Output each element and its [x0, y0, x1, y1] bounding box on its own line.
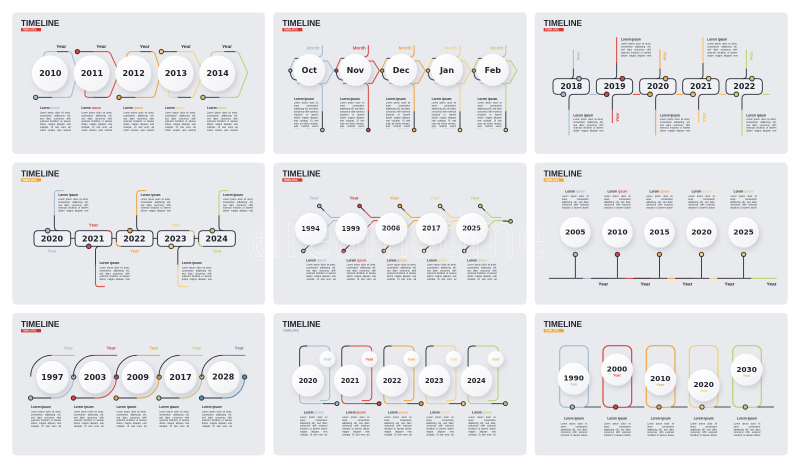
step 2020: 2020 [41, 234, 64, 243]
heading: TIMELINE [21, 18, 60, 28]
step Nov: Month [353, 45, 366, 50]
step 2005 [549, 189, 608, 286]
step 2019: Year [615, 112, 620, 122]
panel: hexagon year timeline [12, 12, 265, 154]
step 2010: Lorem ipsum [40, 106, 60, 110]
subtitle tag: TEMPLATES [284, 29, 298, 32]
watermark: dreamstime [253, 202, 547, 272]
panel background [535, 313, 788, 455]
step 2021 [334, 346, 381, 437]
step 2019: 2019 [604, 82, 626, 91]
step 2003: 2003 [84, 373, 106, 382]
step 2015: Lorem ipsum [650, 189, 670, 193]
heading: TIMELINE [282, 319, 321, 329]
step 2017 [157, 345, 204, 428]
step Jan [426, 45, 471, 132]
step 2014: Lorem ipsum [207, 106, 227, 110]
step 2019: Lorem ipsum [621, 38, 641, 42]
step 2021: Year [701, 112, 706, 122]
step 2009: 2009 [127, 373, 149, 382]
step 2020 [292, 346, 339, 437]
subtitle tag: TEMPLATES [545, 179, 559, 182]
panel background [273, 313, 527, 455]
step 2017: Year [192, 345, 201, 350]
step 2028: 2028 [212, 372, 235, 381]
step 2003 [71, 345, 119, 428]
step 2010: 2010 [39, 69, 62, 78]
step 2030: Year [743, 374, 751, 378]
step 2020: Lorem ipsum [692, 189, 712, 193]
step 2023 [157, 223, 212, 287]
step 2020: Year [725, 281, 735, 286]
step 2021 [75, 223, 129, 287]
step 1999 [335, 195, 385, 281]
step 2010: 2010 [650, 374, 671, 383]
step 2025: 2025 [462, 225, 481, 233]
step 1994: 1994 [301, 225, 320, 233]
step 1997: 1997 [41, 373, 63, 382]
step 2020: 2020 [691, 227, 712, 236]
step 2024: 2024 [206, 234, 228, 243]
step Feb: Month [490, 45, 504, 50]
step 2006 [375, 195, 425, 281]
step Oct [289, 45, 333, 132]
step Dec: Dec [393, 66, 410, 75]
step 2015: Year [683, 281, 693, 286]
step 2030: 2030 [736, 365, 757, 374]
step 2022: 2022 [733, 82, 755, 91]
step 2022: Lorem ipsum [746, 113, 766, 117]
step 1997: Year [64, 345, 73, 350]
step Jan: Lorem ipsum [432, 97, 452, 101]
step 2000: Year [613, 374, 621, 378]
step 2021: Lorem ipsum [707, 38, 727, 42]
step 2024 [199, 191, 253, 253]
step 2011: Lorem ipsum [81, 106, 101, 110]
step 2025 [456, 195, 512, 281]
step 2013: Year [181, 44, 191, 49]
step 2018: Year [576, 51, 581, 61]
step 2018 [553, 50, 603, 135]
step 2023 [418, 346, 465, 437]
step 2025: 2025 [733, 227, 754, 236]
step 2000: 2000 [607, 365, 627, 374]
step 2022: 2022 [123, 234, 145, 243]
step Feb: Lorem ipsum [477, 97, 498, 101]
step 2017: 2017 [422, 225, 441, 233]
step Dec: Lorem ipsum [386, 97, 406, 101]
step 2006: 2006 [382, 224, 401, 232]
heading: TIMELINE [544, 18, 582, 28]
step 2000 [601, 346, 644, 437]
step 2010: Year [640, 281, 651, 286]
step 2022 [116, 191, 171, 253]
step 2024: 2024 [467, 377, 486, 385]
step 2013 [158, 44, 203, 132]
heading: TIMELINE [21, 319, 60, 329]
step 2011: Year [96, 44, 106, 49]
step Nov: Lorem ipsum [340, 97, 360, 101]
step Nov [335, 45, 379, 132]
step 2009 [114, 345, 161, 428]
step 1994: Lorem ipsum [306, 258, 326, 262]
step 1994: Year [309, 195, 319, 200]
step 2014 [199, 44, 248, 132]
step 2021: Year [366, 357, 374, 361]
step 2021: Year [89, 223, 98, 228]
panel: linked box timeline [12, 163, 265, 305]
step Oct: Oct [302, 66, 317, 75]
step 2023: Year [450, 357, 458, 361]
step 1990: 1990 [563, 374, 584, 383]
panel: lollipop stem timeline [535, 163, 788, 305]
subtitle tag: TEMPLATES [22, 29, 37, 32]
step 2020 [688, 346, 731, 437]
step 2000: Lorem ipsum [607, 417, 627, 421]
step Oct: Lorem ipsum [294, 97, 314, 101]
panel background [12, 12, 265, 154]
step Feb: Feb [485, 66, 501, 75]
step 2020: Year [663, 51, 668, 61]
step Feb [472, 45, 517, 132]
step 2024: Lorem ipsum [223, 193, 243, 197]
step 2006: Lorem ipsum [387, 258, 407, 262]
panel: boxed year timeline with vertical branches [535, 12, 788, 154]
subtitle tag [544, 329, 564, 333]
step 2017: Lorem ipsum [159, 405, 179, 409]
heading: TIMELINE [282, 169, 321, 179]
step 2014: 2014 [207, 69, 229, 78]
step 2011: 2011 [81, 69, 103, 78]
step 2018: Lorem ipsum [573, 113, 593, 117]
step 2022 [376, 346, 423, 437]
step 2022 [726, 50, 776, 135]
step 2013: Lorem ipsum [165, 106, 185, 110]
panel background [273, 163, 527, 305]
step Dec [380, 45, 425, 132]
step 2022: Year [130, 248, 140, 253]
heading: TIMELINE [544, 319, 582, 329]
panel background [12, 163, 265, 305]
step 2024: Year [212, 248, 222, 253]
heading: TIMELINE [282, 18, 321, 28]
step 2028 [199, 345, 247, 428]
panel background [273, 12, 527, 154]
step 2017: 2017 [169, 373, 192, 382]
step 2010: 2010 [607, 227, 628, 236]
step 2022: Lorem ipsum [388, 410, 408, 414]
step 2012: Lorem ipsum [123, 106, 143, 110]
subtitle tag [282, 178, 302, 182]
heading: TIMELINE [21, 169, 60, 179]
step 2018: 2018 [560, 82, 582, 91]
step 2030: Lorem ipsum [737, 417, 757, 421]
step 2020: Year [323, 357, 332, 361]
step 2021: 2021 [341, 377, 360, 385]
step 2025 [718, 189, 777, 286]
step 2010: Year [56, 44, 66, 49]
step 2005: 2005 [565, 227, 586, 236]
step 1990: Lorem ipsum [564, 417, 584, 421]
step 2021: Lorem ipsum [99, 261, 120, 265]
step 2021: 2021 [690, 82, 712, 91]
subtitle tag [544, 28, 564, 32]
step Dec: Month [399, 45, 412, 50]
step 1999: 1999 [342, 225, 361, 233]
step 2010 [644, 346, 688, 437]
heading: TIMELINE [544, 169, 582, 179]
subtitle tag [544, 178, 564, 182]
step 2005: Year [598, 281, 608, 286]
step Nov: Nov [347, 66, 365, 75]
step 2006: Year [390, 195, 399, 200]
step 2020: Lorem ipsum [660, 113, 680, 117]
step 2020: Lorem ipsum [58, 193, 78, 197]
step 1997: Lorem ipsum [31, 405, 51, 409]
step 2020: 2020 [299, 377, 318, 385]
subtitle tag: TEMPLATES [284, 179, 298, 182]
step 2014: Year [222, 44, 232, 49]
step 2025: Lorem ipsum [467, 258, 487, 262]
step 2012: Year [140, 44, 150, 49]
step Oct: Month [307, 45, 320, 50]
step 2012 [115, 44, 161, 132]
subtitle tag [21, 329, 41, 333]
subtitle tag: TEMPLATES [545, 330, 559, 333]
step 1999: Year [350, 195, 359, 200]
step 2003: Lorem ipsum [74, 405, 94, 409]
step 2020: Year [47, 248, 57, 253]
panel background [535, 163, 788, 305]
step 2013: 2013 [165, 69, 187, 78]
step 2025: Lorem ipsum [734, 189, 754, 193]
step 2024 [460, 346, 507, 437]
subtitle tag [282, 28, 302, 32]
step 2015 [633, 189, 693, 286]
step 2009: Lorem ipsum [116, 405, 136, 409]
subtitle text: TEMPLATES [283, 329, 299, 333]
step 2020: Lorem ipsum [304, 410, 324, 414]
step 2025: Year [767, 281, 777, 286]
step 2020: Lorem ipsum [694, 417, 714, 421]
step 2003: Year [106, 345, 116, 350]
step 2023: Lorem ipsum [182, 261, 202, 265]
panel: frame timeline with year badges [273, 313, 527, 455]
step 2028: Lorem ipsum [202, 405, 222, 409]
step 2020 [34, 191, 88, 253]
step 1997 [28, 345, 76, 428]
subtitle tag [21, 178, 41, 182]
step 2023: Lorem ipsum [430, 410, 450, 414]
step 2021: Lorem ipsum [346, 410, 366, 414]
step 2020: Year [700, 389, 708, 393]
step 2025: Year [470, 195, 480, 200]
subtitle tag: TEMPLATES [22, 179, 37, 182]
step 2019 [596, 38, 651, 123]
panel: rounded column timeline [535, 313, 788, 455]
step 2015: 2015 [649, 227, 670, 236]
step 2022: Lorem ipsum [141, 193, 161, 197]
subtitle tag: TEMPLATES [22, 330, 37, 333]
subtitle tag: TEMPLATES [545, 29, 559, 32]
step 2020: 2020 [693, 380, 714, 389]
step 2011 [74, 44, 119, 132]
step 1990 [558, 346, 601, 437]
step 2017 [416, 195, 466, 281]
step 2023: 2023 [164, 234, 187, 243]
step 2024: Year [492, 357, 500, 361]
step Jan: Jan [439, 66, 454, 75]
panel: curved arc timeline [12, 313, 265, 455]
panel: branching line timeline [273, 163, 527, 305]
step 2009: Year [149, 345, 159, 350]
panel: month timeline [273, 12, 527, 154]
subtitle tag [21, 28, 41, 32]
step 2020 [676, 189, 735, 286]
step 2022: Year [749, 51, 754, 61]
panel background [12, 313, 265, 455]
step 2010: Lorem ipsum [607, 189, 628, 193]
step 1990: Year [570, 382, 578, 386]
watermark rings [248, 233, 276, 261]
step 2022: 2022 [383, 377, 402, 385]
step 2023: 2023 [425, 377, 444, 385]
step 1994 [295, 195, 345, 281]
step 2010: Lorem ipsum [651, 417, 671, 421]
step 2005: Lorem ipsum [565, 189, 585, 193]
panel background [535, 12, 788, 154]
step 2010 [591, 189, 651, 286]
step 1999: Lorem ipsum [347, 258, 367, 262]
step 2022: Year [408, 357, 416, 361]
step 2028: Year [235, 345, 244, 350]
step 2030 [731, 346, 774, 437]
step 2020: 2020 [647, 82, 669, 91]
step 2017: Year [430, 195, 440, 200]
step 2010 [32, 44, 78, 132]
step 2010: Year [656, 383, 665, 387]
step 2024: Lorem ipsum [472, 410, 492, 414]
step 2012: 2012 [123, 69, 145, 78]
step 2023: Year [171, 223, 181, 228]
step 2020 [640, 50, 690, 135]
step Jan: Month [445, 45, 458, 50]
step 2021 [683, 38, 737, 123]
step 2017: Lorem ipsum [427, 258, 447, 262]
step 2021: 2021 [82, 234, 104, 243]
